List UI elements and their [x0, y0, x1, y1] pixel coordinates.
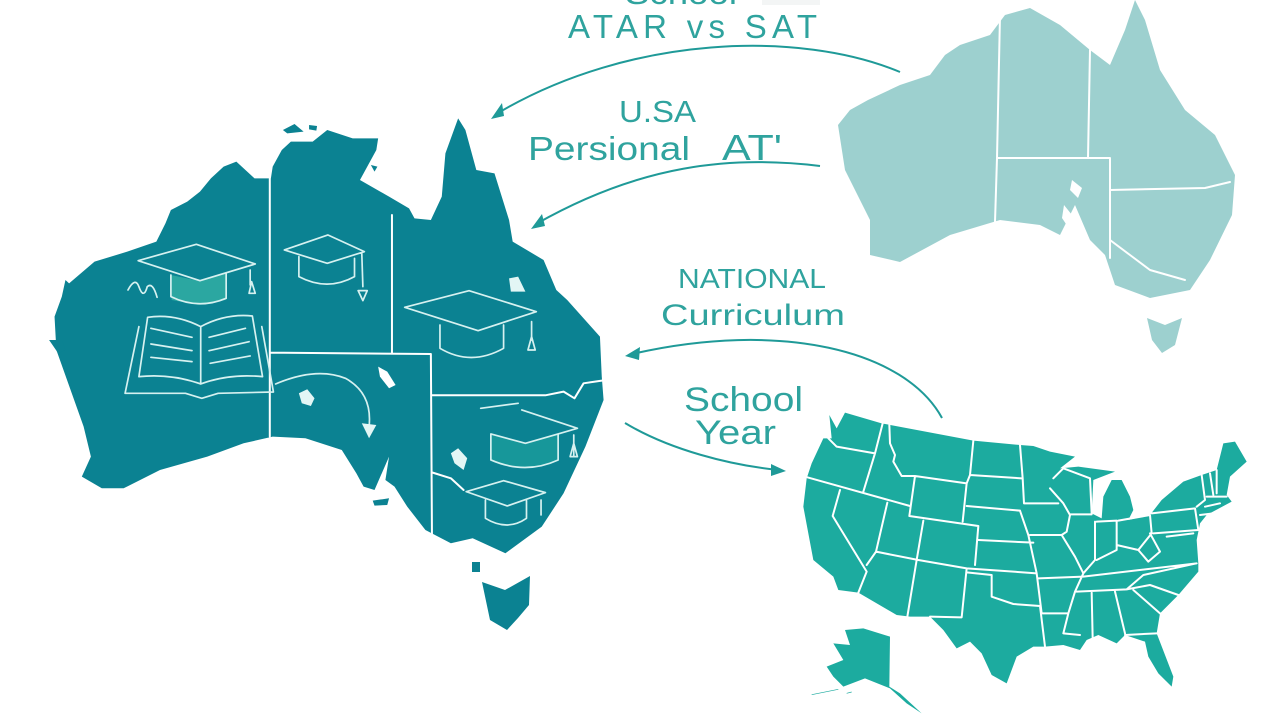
contiguous states — [803, 413, 1247, 687]
light map state borders — [995, 15, 1230, 280]
small white decorations — [299, 277, 525, 470]
light Tasmania — [1147, 318, 1182, 353]
icon: graduation cap 3 — [405, 291, 536, 357]
map: United States — [803, 413, 1247, 713]
state borders — [807, 423, 1227, 647]
label: Persional AT — [528, 127, 782, 168]
icon: graduation cap 5 — [466, 481, 545, 525]
map: Australia with education icons — [49, 118, 604, 630]
Australia mainland — [55, 118, 604, 553]
icon: graduation cap 1 — [138, 244, 255, 305]
icon: graduation cap 2 — [284, 235, 367, 301]
arrow: Personal AT — [531, 162, 820, 229]
heading: ATAR vs SAT: ATAR vs SAT — [568, 8, 817, 45]
Alaska — [827, 628, 922, 713]
northern islands and Kangaroo Island — [49, 124, 389, 506]
icon: graduation cap 4 — [481, 403, 577, 467]
arrow: USA to Australia, ATAR vs SAT — [491, 46, 900, 119]
icon: curved arrow — [276, 374, 376, 438]
label: Persional AT: AT' — [722, 127, 782, 168]
label: National: NATIONAL — [678, 263, 826, 294]
lake cut-out — [378, 367, 396, 388]
arrow: School Year — [625, 423, 786, 476]
label: Curriculum: Curriculum — [661, 299, 845, 332]
icon: open book — [125, 316, 273, 398]
label: School: School — [684, 381, 803, 419]
light map lake cut-outs — [1062, 180, 1082, 230]
Aleutian trail — [812, 689, 852, 695]
label: U.SA: U.SA — [619, 94, 696, 129]
faint cropped mark — [762, 0, 820, 5]
arrow: National Curriculum — [625, 340, 942, 418]
label: Year: Year — [695, 414, 776, 452]
map: Australia, light version — [838, 0, 1235, 353]
state borders — [270, 178, 602, 537]
icon: squiggle — [128, 282, 157, 297]
Tasmania — [472, 562, 530, 630]
label: Persional AT: Persional — [528, 130, 690, 167]
